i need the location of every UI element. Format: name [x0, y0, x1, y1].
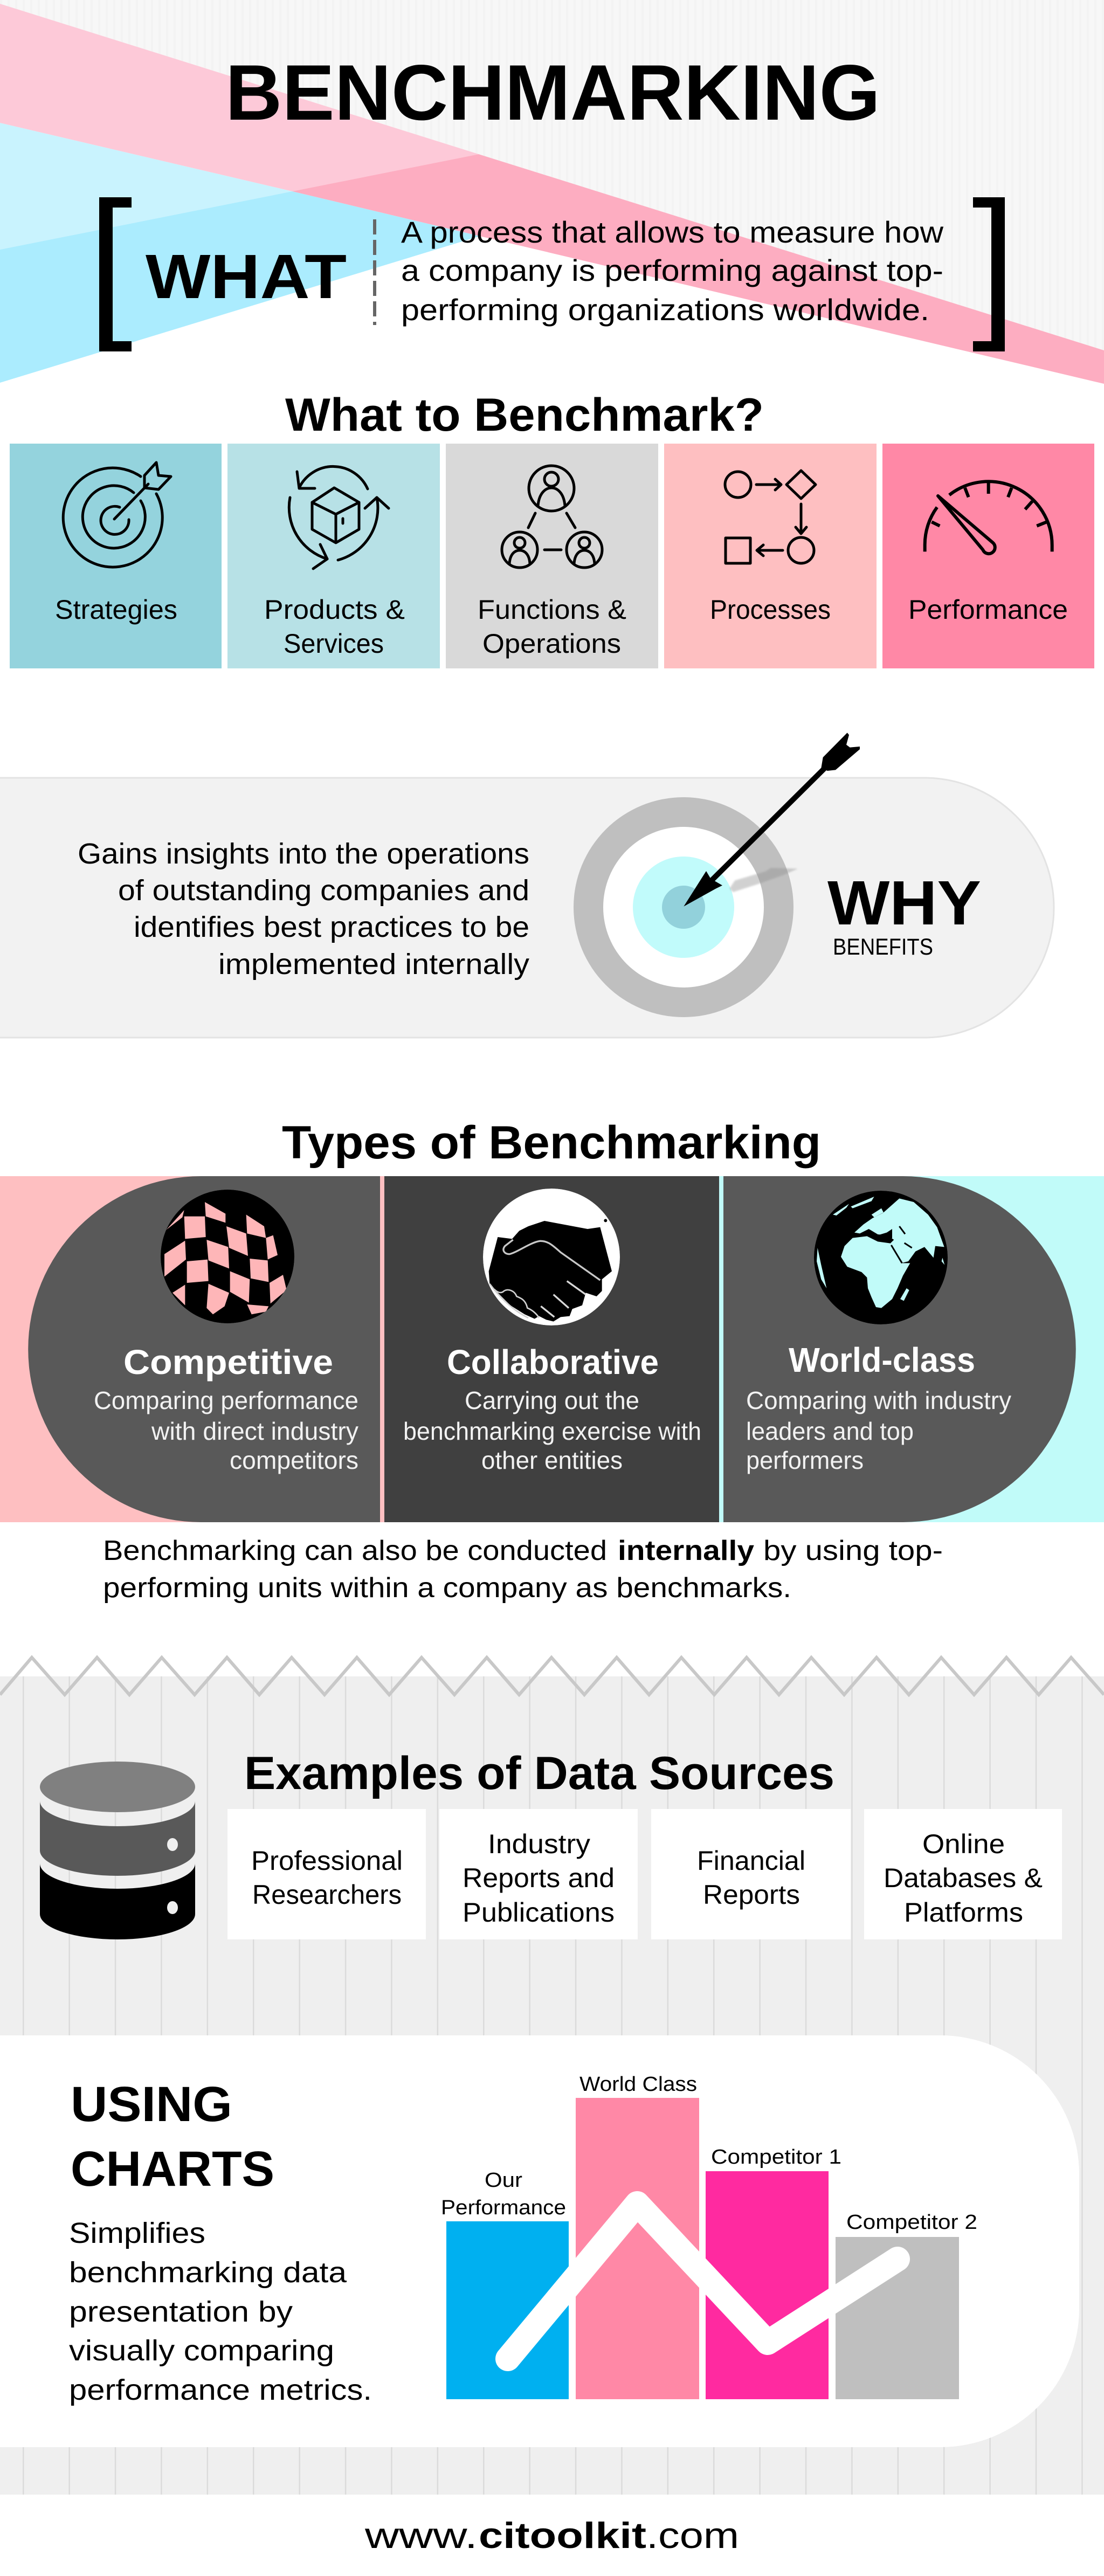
icon: database [40, 1762, 195, 1939]
why description: identifies best practices to be [134, 911, 529, 943]
bar chart: Performance [441, 2197, 566, 2219]
background: top diagonal shapes [0, 0, 1104, 384]
title: World-class [789, 1341, 975, 1379]
description: leaders and top [746, 1417, 914, 1445]
panel: collaborative [384, 1176, 719, 1522]
heading: types of benchmarking: Types of Benchmarking [282, 1117, 821, 1169]
panel: performance [882, 444, 1094, 668]
description [746, 1386, 1011, 1474]
card: professional researchers [227, 1809, 426, 1939]
benefits label: BENEFITS [833, 934, 933, 960]
bar chart [441, 2073, 977, 2399]
right bracket [973, 197, 1005, 351]
what label: WHAT [146, 241, 347, 312]
text block: internal benchmarking note: by using top- [763, 1535, 943, 1566]
card: financial reports [651, 1809, 851, 1939]
why description: implemented internally [218, 948, 529, 980]
description [403, 1386, 701, 1474]
panel: world-class [723, 1176, 1076, 1522]
panel: why [0, 733, 1054, 1038]
card: online databases and platforms [864, 1809, 1062, 1939]
label [264, 595, 405, 659]
card: industry reports and publications: Publications [463, 1897, 615, 1928]
label: Products & [264, 595, 405, 625]
title: Competitive [123, 1343, 333, 1382]
card: professional researchers: Researchers [252, 1880, 402, 1910]
icon: box with arrows [289, 466, 389, 569]
footer url: .com [646, 2515, 739, 2556]
description: performers [746, 1446, 864, 1474]
heading: using charts: CHARTS [71, 2142, 274, 2197]
text block: charts description: performance metrics. [69, 2374, 372, 2406]
icon: process flow [725, 471, 816, 563]
text block: charts description: visually comparing [69, 2335, 334, 2367]
heading: examples of data sources: Examples of Data Sources [244, 1748, 834, 1799]
panel: grey lower section background [0, 1658, 1104, 2495]
description: Comparing with industry [746, 1386, 1011, 1414]
description: competitors [230, 1446, 358, 1474]
panel: using charts [0, 2035, 1079, 2447]
icon: globe [814, 1191, 948, 1324]
title: Collaborative [447, 1343, 659, 1382]
card: online databases and platforms: Online [922, 1829, 1005, 1859]
heading: using charts [71, 2077, 274, 2197]
card: financial reports: Reports [703, 1880, 800, 1910]
footer url [364, 2515, 739, 2556]
description: with direct industry [151, 1417, 358, 1445]
description: other entities [481, 1446, 623, 1474]
what description: A process that allows to measure how [401, 215, 944, 249]
panel: functions and operations [446, 444, 658, 668]
text block: charts description: benchmarking data [69, 2256, 347, 2289]
label: Services [284, 629, 384, 659]
what panel [99, 197, 1005, 351]
text block: internal benchmarking note: performing units within a company as benchmarks. [103, 1572, 791, 1604]
bar chart: World Class [579, 2073, 697, 2096]
panel: processes [664, 444, 877, 668]
why description [78, 838, 529, 980]
left bracket [99, 197, 132, 351]
label: Operations [482, 629, 621, 659]
description [94, 1386, 358, 1474]
panel: strategies [10, 444, 222, 668]
icon: handshake [483, 1189, 620, 1325]
heading: using charts: USING [71, 2077, 232, 2132]
description: Comparing performance [94, 1386, 358, 1414]
label: Strategies [55, 595, 177, 625]
heading: what to benchmark: What to Benchmark? [285, 389, 764, 441]
why label: WHY [827, 868, 981, 938]
what description: a company is performing against top- [401, 253, 943, 287]
description: benchmarking exercise with [403, 1417, 701, 1445]
card: online databases and platforms: Platforms [904, 1897, 1023, 1928]
text block: internal benchmarking note [103, 1535, 943, 1604]
why description: of outstanding companies and [118, 874, 529, 907]
card: financial reports: Financial [697, 1846, 805, 1876]
what description: performing organizations worldwide. [401, 293, 929, 327]
text block: internal benchmarking note: Benchmarking can also be conducted [103, 1535, 607, 1566]
why description: Gains insights into the operations [78, 838, 529, 870]
card: professional researchers: Professional [251, 1846, 403, 1876]
label: Functions & [478, 595, 626, 625]
card: industry reports and publications: Industry [488, 1829, 590, 1859]
card: online databases and platforms: Databases & [884, 1863, 1043, 1893]
text block: charts description [69, 2217, 372, 2406]
icon: target [63, 462, 171, 567]
label: Processes [710, 595, 831, 625]
bar chart: Our [485, 2169, 522, 2192]
text block: internal benchmarking note: internally [618, 1535, 754, 1566]
what description [401, 215, 944, 327]
icon: gauge [925, 481, 1052, 554]
panel: products and services [227, 444, 440, 668]
label: Performance [908, 595, 1068, 625]
icon: people network [502, 466, 602, 568]
title: BENCHMARKING [225, 49, 880, 136]
bar chart: Competitor 2 [846, 2211, 977, 2234]
panel: competitive [28, 1176, 380, 1522]
card: industry reports and publications [439, 1809, 638, 1939]
footer url: www. [364, 2515, 478, 2556]
description: Carrying out the [465, 1386, 639, 1414]
text block: charts description: presentation by [69, 2296, 293, 2328]
bar chart: Competitor 1 [711, 2146, 841, 2168]
icon: checkered flag [161, 1190, 294, 1323]
text block: charts description: Simplifies [69, 2217, 205, 2249]
card: industry reports and publications: Reports and [463, 1863, 615, 1893]
panel: types band [0, 1176, 1104, 1522]
label [478, 595, 626, 659]
footer url: citoolkit [479, 2515, 646, 2556]
icon: target with arrow [574, 733, 860, 1017]
